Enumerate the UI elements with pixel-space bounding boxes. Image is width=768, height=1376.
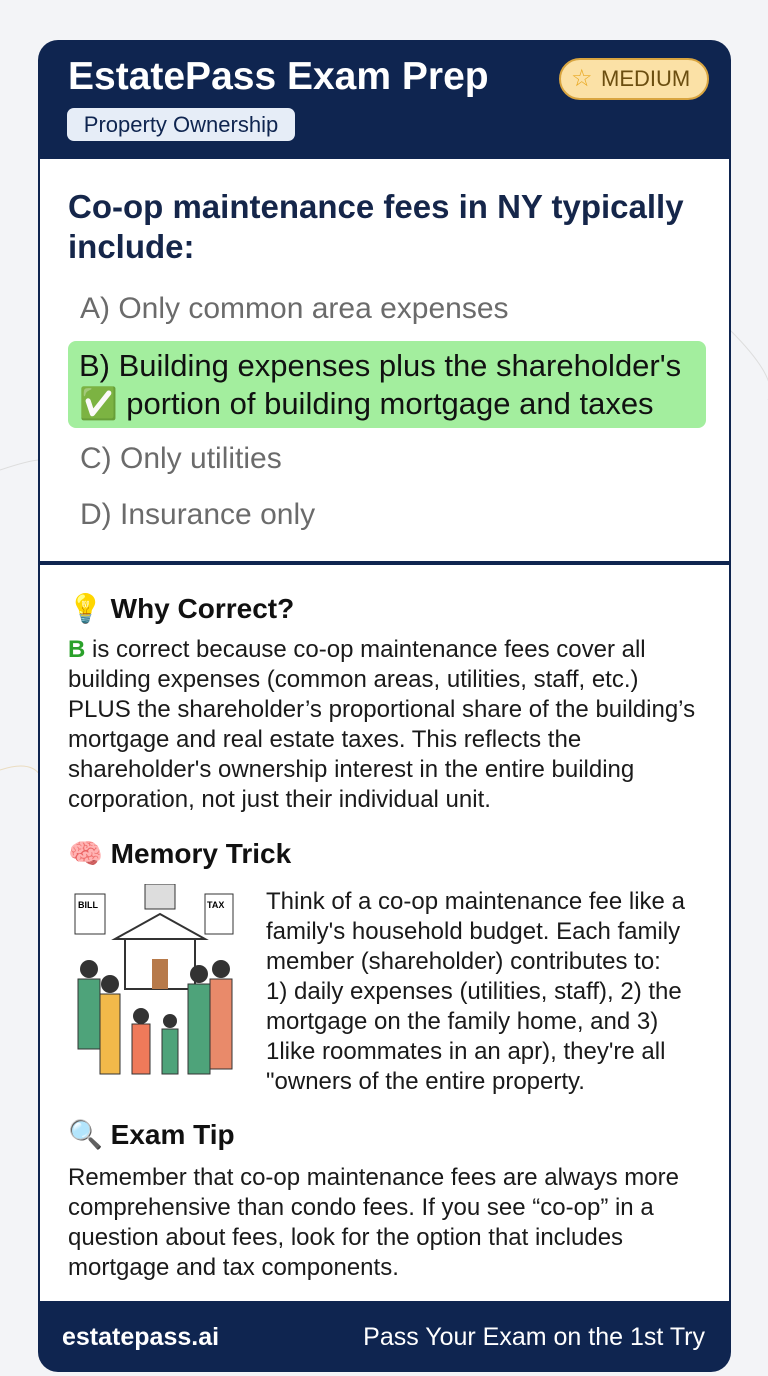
- text: memory trick: Think of a co-op maintenance fee like a: [266, 888, 685, 915]
- badge: difficulty: ☆: [571, 65, 593, 92]
- title: EstatePass Exam Prep: [68, 55, 489, 98]
- question text: [68, 188, 684, 265]
- option C: C) Only utilities: [80, 442, 282, 475]
- text: memory trick: "owners of the entire property.: [266, 1068, 585, 1095]
- footer: [62, 1323, 705, 1351]
- heading: memory trick: 🧠 Memory Trick: [68, 838, 291, 869]
- option B correct: [68, 341, 706, 428]
- text: memory trick: member (shareholder) contributes to:: [266, 948, 661, 975]
- question text: Co-op maintenance fees in NY typically: [68, 188, 684, 225]
- text: why correct: shareholder's ownership interest in the entire building: [68, 756, 634, 783]
- text: exam tip: Remember that co-op maintenance fees are always more: [68, 1164, 679, 1191]
- header: [67, 55, 709, 141]
- illustration: family and house: TAX: [207, 900, 224, 910]
- option A: A) Only common area expenses: [80, 292, 509, 325]
- text: why correct: corporation, not just their individual unit.: [68, 786, 491, 813]
- illustration: family and house: BILL: [78, 900, 98, 910]
- footer tagline: Pass Your Exam on the 1st Try: [363, 1323, 705, 1351]
- option B correct: B) Building expenses plus the shareholder's: [79, 348, 681, 383]
- heading: exam tip: 🔍 Exam Tip: [68, 1119, 235, 1150]
- text: why correct: PLUS the shareholder’s proportional share of the building’s: [68, 696, 695, 723]
- text: exam tip: mortgage and tax components.: [68, 1254, 399, 1281]
- text: exam tip: [68, 1164, 679, 1281]
- panel: explanation: [40, 565, 729, 1301]
- text: exam tip: question about fees, look for the option that includes: [68, 1224, 623, 1251]
- text: memory trick: 1like roommates in an apr), they're all: [266, 1038, 665, 1065]
- heading: why correct: 💡 Why Correct?: [68, 593, 294, 624]
- badge: difficulty: MEDIUM: [601, 66, 690, 91]
- text: memory trick: [266, 888, 685, 1095]
- text: why correct: building expenses (common areas, utilities, staff, etc.): [68, 666, 638, 693]
- option D: D) Insurance only: [80, 498, 315, 531]
- text: memory trick: family's household budget. Each family: [266, 918, 680, 945]
- tag: category: [67, 108, 295, 141]
- footer brand: estatepass.ai: [62, 1323, 219, 1351]
- badge: difficulty: [559, 58, 709, 100]
- tag: category: Property Ownership: [84, 112, 278, 137]
- text: memory trick: mortgage on the family home, and 3): [266, 1008, 658, 1035]
- text: exam tip: comprehensive than condo fees. If you see “co-op” in a: [68, 1194, 654, 1221]
- text: why correct: [68, 636, 695, 813]
- illustration: family and house: [74, 884, 234, 1074]
- panel: question: [40, 159, 729, 561]
- text: memory trick: 1) daily expenses (utilities, staff), 2) the: [266, 978, 682, 1005]
- option B correct: ✅ portion of building mortgage and taxes: [79, 386, 654, 421]
- text: why correct: B is correct because co-op maintenance fees cover all: [68, 636, 646, 663]
- text: why correct: mortgage and real estate taxes. This reflects the: [68, 726, 581, 753]
- question text: include:: [68, 228, 195, 265]
